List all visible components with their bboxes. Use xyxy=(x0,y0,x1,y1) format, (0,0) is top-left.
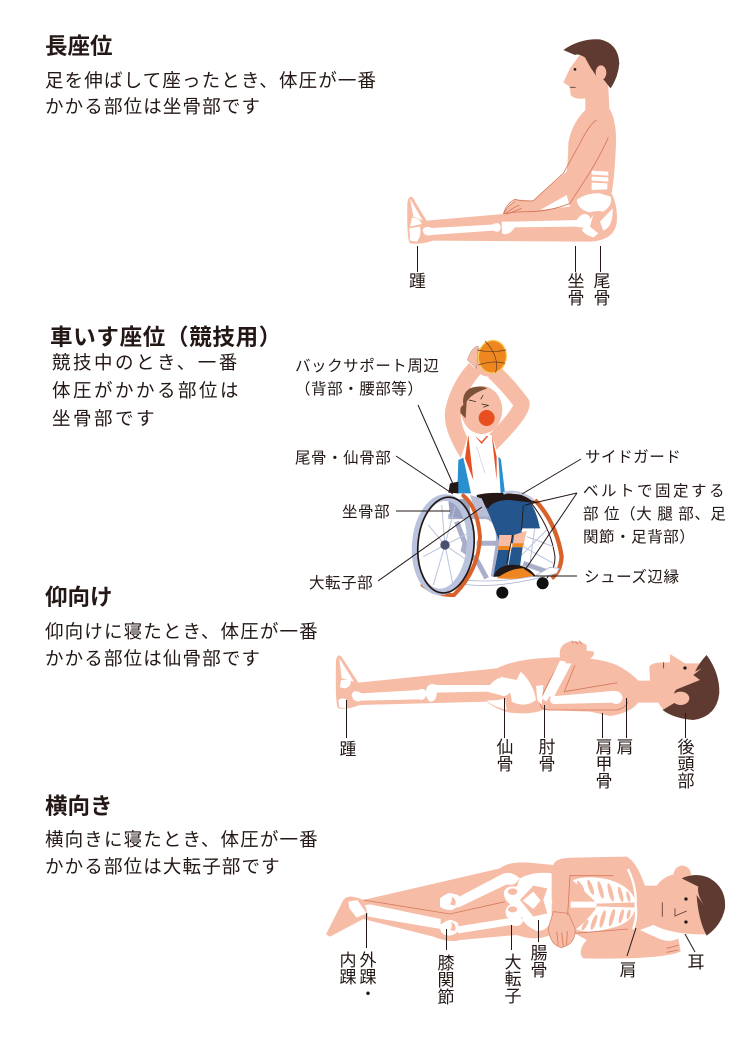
label: ischium: 骨 xyxy=(568,289,584,308)
label: ischium: 坐骨部 xyxy=(342,503,390,521)
label: ischium: 坐 xyxy=(568,272,584,291)
section: long sitting xyxy=(45,34,619,308)
label: belt fixed areas: 関節・足背部） xyxy=(583,528,695,546)
label: sacrum xyxy=(496,698,514,774)
illustration: lateral man xyxy=(326,857,725,959)
label: knee joint xyxy=(438,929,454,1007)
label: ilium: 腸 xyxy=(530,944,548,963)
text: lateral description: 横向きに寝たとき、体圧が一番 xyxy=(45,829,319,850)
label: ear xyxy=(685,934,704,972)
label: coccyx and sacrum xyxy=(295,449,453,494)
label: ilium: 骨 xyxy=(530,961,548,980)
label: belt fixed areas: ベルトで固定する xyxy=(583,482,727,500)
heading: wheelchair sitting: 車いす座位（競技用） xyxy=(50,325,282,350)
label: coccyx: 骨 xyxy=(594,289,610,308)
label: heel xyxy=(409,246,426,291)
label: greater trochanter: 転 xyxy=(504,970,522,989)
label: elbow xyxy=(538,705,556,774)
label: scapula: 肩 xyxy=(596,738,612,757)
label: greater trochanter: 大 xyxy=(504,953,522,972)
illustration: seated man xyxy=(407,39,619,244)
label: shoulder xyxy=(616,698,634,757)
label: malleolus: 踝 xyxy=(360,968,376,987)
label: back support xyxy=(295,357,453,484)
label: ilium xyxy=(530,920,548,980)
label: shoulder: 肩 xyxy=(616,738,634,757)
label: shoulder xyxy=(620,928,636,980)
label: elbow: 肘 xyxy=(538,738,556,757)
label: belt fixed areas: 部 位（大 腿 部、足 xyxy=(583,505,727,523)
text: wheelchair description: 競技中のとき、一番 xyxy=(52,352,240,373)
label: greater trochanter: 子 xyxy=(504,987,522,1006)
label: malleolus: 内 xyxy=(340,951,356,970)
label: coccyx xyxy=(594,246,610,308)
label: knee joint: 節 xyxy=(438,988,454,1007)
label: ischium xyxy=(342,503,450,521)
label: side guard: サイドガード xyxy=(585,448,681,466)
text: long sitting description: かかる部位は坐骨部です xyxy=(45,96,261,117)
label: back support: （背部・腰部等） xyxy=(295,380,423,398)
illustration: supine man xyxy=(336,641,719,720)
label: scapula: 骨 xyxy=(596,772,612,791)
text: supine description: 仰向けに寝たとき、体圧が一番 xyxy=(45,621,319,642)
label: scapula: 甲 xyxy=(596,755,612,774)
label: knee joint: 膝 xyxy=(438,954,454,973)
label: heel: 踵 xyxy=(340,740,356,759)
text: wheelchair description: 体圧がかかる部位は xyxy=(52,380,241,401)
text: wheelchair description: 坐骨部です xyxy=(52,408,157,429)
text: supine description: かかる部位は仙骨部です xyxy=(45,648,261,669)
label: elbow: 骨 xyxy=(538,755,556,774)
label: ear: 耳 xyxy=(688,953,704,972)
section: wheelchair sitting xyxy=(50,325,727,599)
label: back support: バックサポート周辺 xyxy=(295,357,439,375)
label: coccyx and sacrum: 尾骨・仙骨部 xyxy=(295,449,391,467)
label: side guard xyxy=(522,448,681,494)
label: occiput: 後 xyxy=(678,738,694,757)
text: long sitting description: 足を伸ばして座ったとき、体圧が一番 xyxy=(45,70,377,91)
label: greater trochanter xyxy=(309,507,482,592)
label: ischium xyxy=(568,246,584,308)
section: supine xyxy=(45,585,719,791)
label: heel: 踵 xyxy=(409,272,426,291)
section: lateral xyxy=(45,794,725,1007)
label: occiput xyxy=(678,713,694,791)
label: heel xyxy=(340,700,356,759)
label: sacrum: 骨 xyxy=(496,755,514,774)
label: greater trochanter: 大転子部 xyxy=(309,574,373,592)
label: belt fixed areas xyxy=(525,482,727,570)
heading: lateral: 横向き xyxy=(45,794,113,819)
label: malleolus: 外 xyxy=(360,951,376,970)
label: shoulder: 肩 xyxy=(620,961,636,980)
heading: supine: 仰向け xyxy=(45,585,113,610)
label: knee joint: 関 xyxy=(438,971,454,990)
label: coccyx: 尾 xyxy=(594,272,610,291)
illustration: wheelchair athlete xyxy=(411,339,562,599)
label: malleolus xyxy=(340,913,376,1004)
heading: long sitting: 長座位 xyxy=(45,34,113,59)
label: greater trochanter xyxy=(504,925,522,1006)
text: lateral description: かかる部位は大転子部です xyxy=(45,856,281,877)
label: occiput: 頭 xyxy=(678,755,694,774)
label: malleolus: ・ xyxy=(360,985,376,1004)
label: sacrum: 仙 xyxy=(496,738,514,757)
label: occiput: 部 xyxy=(678,772,694,791)
label: scapula xyxy=(596,713,612,791)
label: malleolus: 踝 xyxy=(340,968,356,987)
label: shoe edge: シューズ辺縁 xyxy=(584,568,680,586)
